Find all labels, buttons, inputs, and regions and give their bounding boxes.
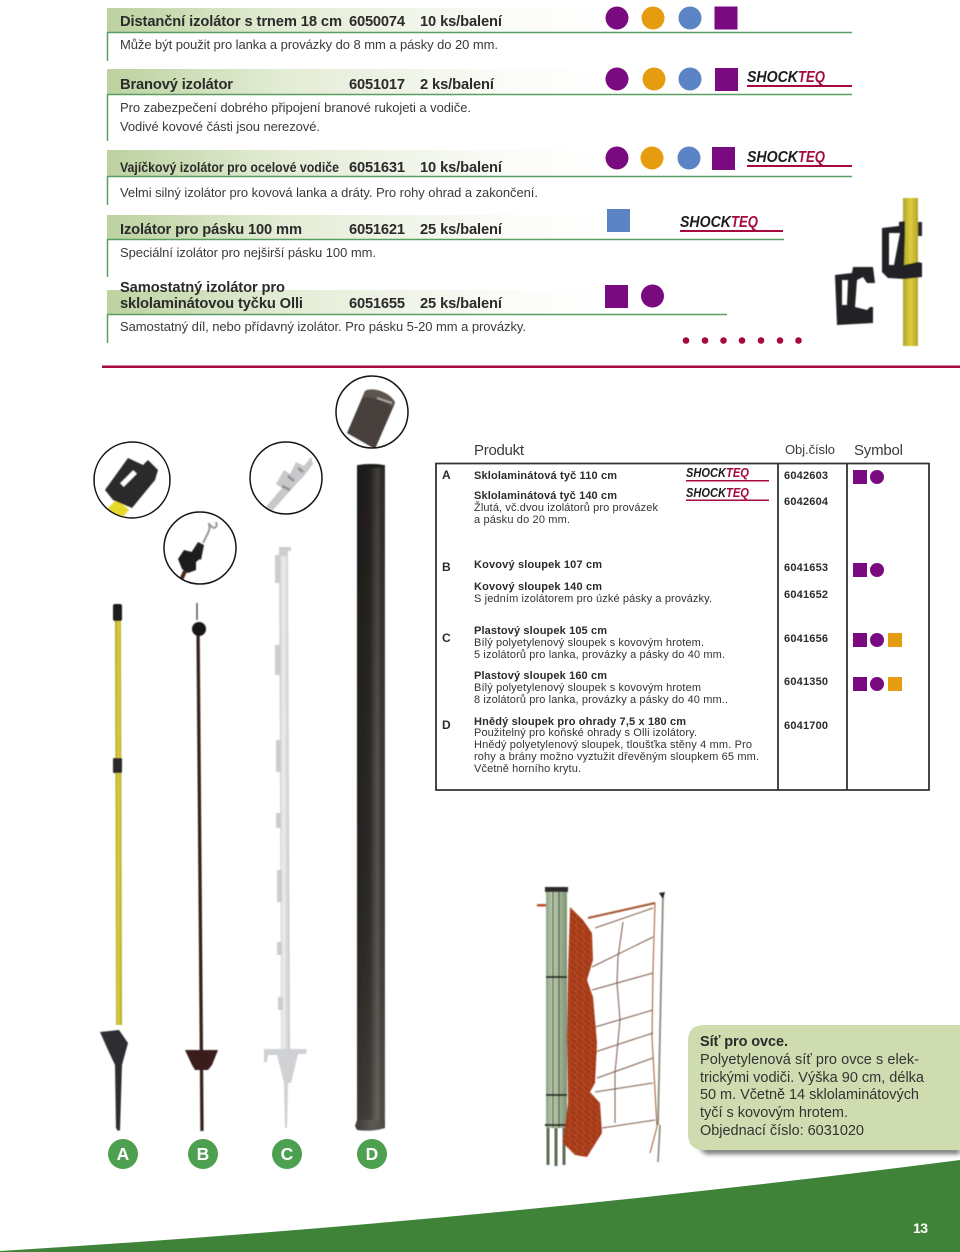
panel: gate insulator product [107, 68, 852, 141]
row C: Bílý polyetylenový sloupek s kovovým hrotem. [474, 637, 704, 649]
panel: gate insulator product: 2 ks/balení [420, 77, 495, 93]
row B: 6041653 [784, 562, 828, 574]
panel: egg insulator product: TEQ [798, 149, 825, 166]
pole A: yellow rod [100, 604, 128, 1131]
panel: spacer insulator product: 6050074 [349, 14, 406, 30]
panel: tape insulator product: TEQ [731, 214, 758, 231]
table headers: Produkt [474, 442, 525, 459]
row of red dots [683, 337, 802, 344]
callout: sheep net [688, 1025, 960, 1154]
row D [442, 716, 828, 775]
panel: spacer insulator product [107, 6, 852, 61]
callout: sheep net: Polyetylenová síť pro ovce s elek- [700, 1052, 919, 1068]
page number: 13 [913, 1220, 928, 1236]
row A: TEQ [726, 486, 749, 500]
row B: Kovový sloupek 140 cm [474, 581, 602, 593]
photo: sheep net [537, 887, 665, 1166]
panel: tape insulator product [107, 209, 784, 277]
panel: gate insulator product: SHOCK [747, 69, 800, 86]
row B [442, 559, 884, 605]
row A: Žlutá, vč.dvou izolátorů pro provázek [474, 501, 658, 514]
table headers: Obj.číslo [785, 442, 835, 457]
label D: D [366, 1144, 378, 1164]
row C: 6041656 [784, 633, 828, 645]
row D: Hnědý sloupek pro ohrady 7,5 x 180 cm [474, 716, 686, 728]
panel: spacer insulator product: Může být použit pro lanka a provázky do 8 mm a pásky do 20 mm. [120, 37, 498, 52]
label B [188, 1139, 218, 1169]
panel: gate insulator product: 6051017 [349, 77, 405, 93]
panel: Olli insulator product: 6051655 [349, 296, 405, 312]
detail circle: pole B insulator [164, 512, 236, 584]
row D: rohy a brány možno vyztužit dřevěným sloupkem 65 mm. [474, 751, 759, 763]
table headers [474, 442, 903, 459]
row A: 6042603 [784, 470, 828, 482]
detail circle: pole C clips [250, 442, 322, 514]
panel: spacer insulator product: 10 ks/balení [420, 14, 503, 30]
row A: A [442, 468, 451, 482]
row A: a pásku do 20 mm. [474, 514, 570, 526]
row B: S jedním izolátorem pro úzké pásky a provázky. [474, 593, 712, 605]
panel: gate insulator product: Pro zabezpečení dobrého připojení branové rukojeti a vodiče. [120, 100, 471, 115]
callout: sheep net: Síť pro ovce. [700, 1034, 788, 1050]
table headers: Symbol [854, 442, 903, 459]
panel: Olli insulator product: Samostatný izolátor pro [120, 280, 285, 296]
footer green swoosh [0, 1160, 960, 1252]
row A [442, 466, 884, 526]
callout: sheep net: tyčí s kovovým hrotem. [700, 1105, 848, 1121]
product table [436, 464, 929, 790]
row C: Plastový sloupek 160 cm [474, 670, 607, 682]
row D: Použitelný pro koňské ohrady s Olli izolátory. [474, 727, 697, 739]
panel: Olli insulator product: Samostatný díl, nebo přídavný izolátor. Pro pásku 5-20 mm a provázky. [120, 319, 526, 334]
photo: insulators on yellow rod [835, 198, 922, 346]
row C: 8 izolátorů pro lanka, provázky a pásky do 40 mm.. [474, 694, 728, 706]
callout: sheep net: trickými vodiči. Výška 90 cm, délka [700, 1070, 925, 1086]
label D [357, 1139, 387, 1169]
label B: B [197, 1144, 209, 1164]
panel: tape insulator product: 25 ks/balení [420, 222, 503, 238]
row D: D [442, 718, 451, 732]
panel: egg insulator product: Vajíčkový izolátor pro ocelové vodiče [120, 160, 339, 175]
detail circle: pole D top [336, 376, 408, 449]
label C [272, 1139, 302, 1169]
row A: TEQ [726, 466, 749, 480]
divider line [102, 366, 960, 368]
panel: tape insulator product: Izolátor pro pásku 100 mm [120, 222, 302, 238]
panel: egg insulator product: 10 ks/balení [420, 160, 503, 176]
row D: 6041700 [784, 720, 828, 732]
row D: Hnědý polyetylenový sloupek, tloušťka stěny 4 mm. Pro [474, 739, 752, 751]
detail circle: pole A insulator [94, 442, 170, 520]
panel: Olli insulator product: 25 ks/balení [420, 296, 503, 312]
label C: C [281, 1144, 294, 1164]
row B: 6041652 [784, 589, 828, 601]
row A: Sklolaminátová tyč 110 cm [474, 470, 617, 482]
panel: gate insulator product: Vodivé kovové části jsou nerezové. [120, 119, 320, 134]
panel: egg insulator product: Velmi silný izolátor pro kovová lanka a dráty. Pro rohy ohrad a zakončení. [120, 185, 538, 200]
pole C: white plastic post [264, 547, 307, 1128]
row C: C [442, 631, 451, 645]
row C [442, 625, 902, 706]
row D: Včetně horního krytu. [474, 763, 581, 775]
row C: Bílý polyetylenový sloupek s kovovým hrotem [474, 682, 701, 694]
label A [108, 1139, 138, 1169]
panel: egg insulator product: 6051631 [349, 160, 405, 176]
panel: Olli insulator product: sklolaminátovou tyčku Olli [120, 296, 303, 312]
row A: 6042604 [784, 496, 829, 508]
panel: tape insulator product: Speciální izolátor pro nejširší pásku 100 mm. [120, 245, 376, 260]
row A: Sklolaminátová tyč 140 cm [474, 490, 617, 502]
row C: Plastový sloupek 105 cm [474, 625, 607, 637]
pole D: brown post [355, 464, 385, 1131]
panel: tape insulator product: 6051621 [349, 222, 405, 238]
row B: Kovový sloupek 107 cm [474, 559, 602, 571]
panel: tape insulator product: SHOCK [680, 214, 733, 231]
label A: A [117, 1144, 130, 1164]
panel: egg insulator product: SHOCK [747, 149, 800, 166]
row C: 5 izolátorů pro lanka, provázky a pásky do 40 mm. [474, 649, 725, 661]
row A: SHOCK [686, 486, 727, 500]
row A: SHOCK [686, 466, 727, 480]
pole B: metal rod [185, 603, 218, 1131]
callout: sheep net: Objednací číslo: 6031020 [700, 1123, 864, 1139]
callout: sheep net: 50 m. Včetně 14 sklolaminátových [700, 1087, 919, 1103]
row B: B [442, 560, 451, 574]
panel: gate insulator product: TEQ [798, 69, 825, 86]
panel: Olli insulator product [107, 280, 727, 343]
row C: 6041350 [784, 676, 828, 688]
panel: egg insulator product [107, 146, 852, 205]
panel: gate insulator product: Branový izolátor [120, 77, 233, 93]
panel: spacer insulator product: Distanční izolátor s trnem 18 cm [120, 14, 342, 30]
